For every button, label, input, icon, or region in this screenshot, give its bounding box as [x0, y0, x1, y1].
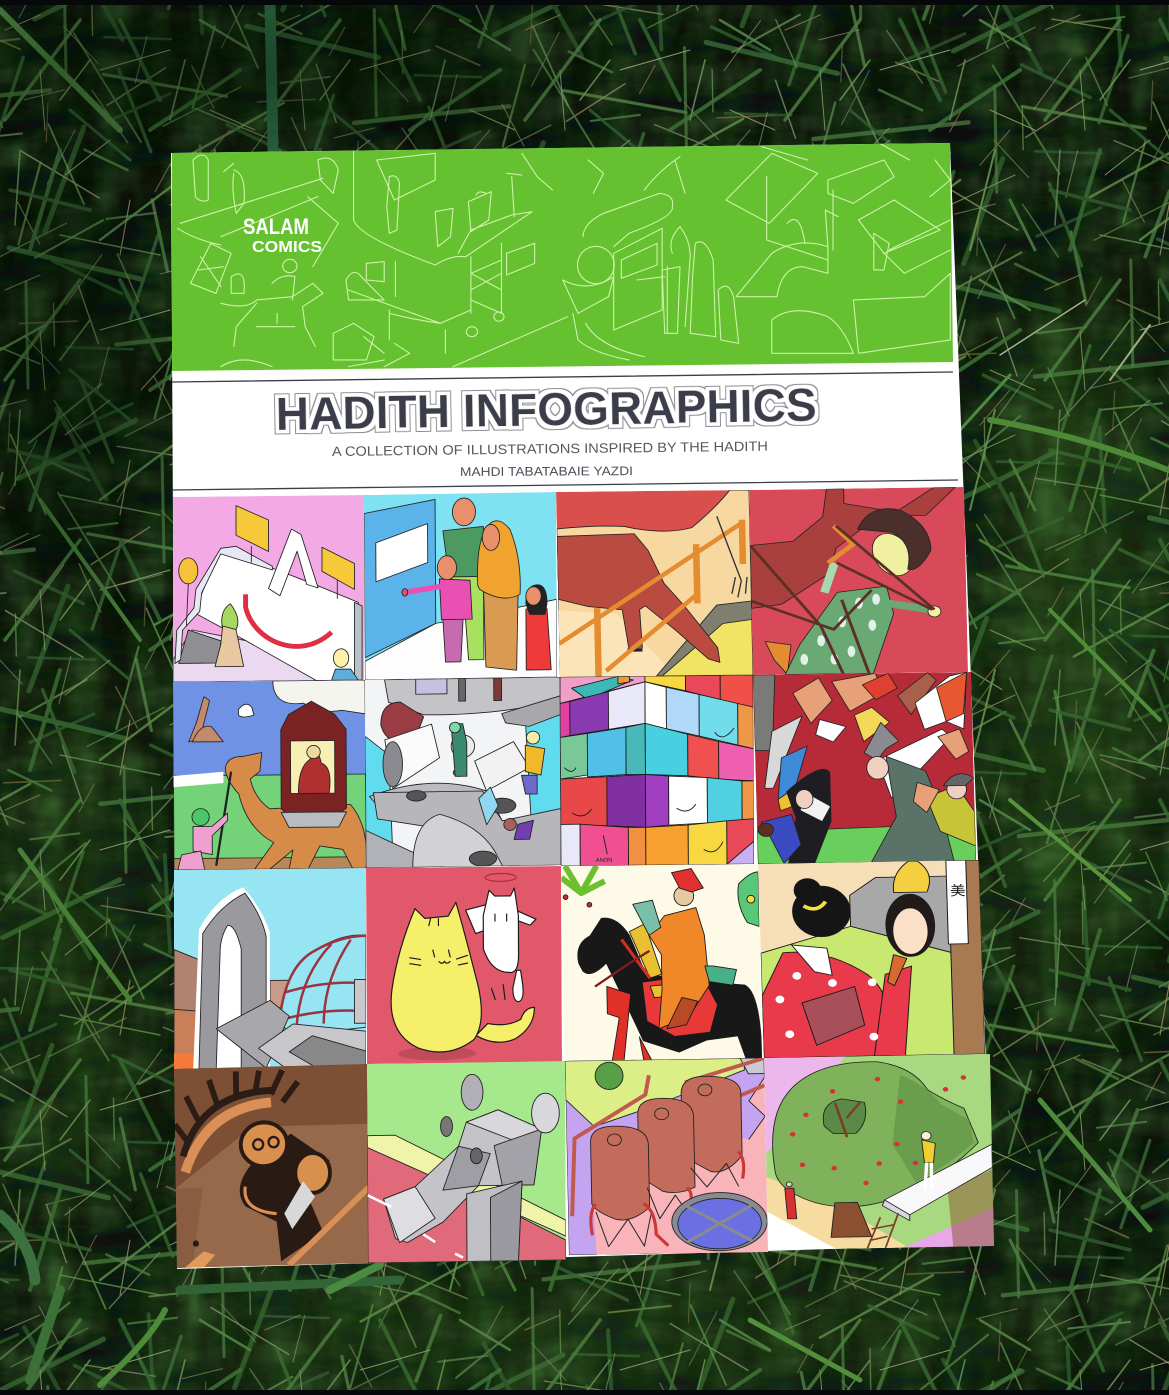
green header panel with line art [165, 140, 960, 375]
book cover [165, 140, 994, 1269]
panel: boy with slingshot [749, 487, 968, 675]
panel: grey robot [367, 1061, 566, 1263]
panel: three tanks [565, 1058, 768, 1255]
panel: arch and dome [174, 868, 366, 1069]
panel: camel and howdah [173, 680, 367, 870]
panel: falling bricks and figures [753, 672, 976, 864]
band rules [172, 372, 958, 490]
title band [172, 372, 958, 490]
panel: machine workshop [365, 677, 561, 868]
panel: coloured smiling bricks [560, 675, 754, 866]
panel: family at door [364, 492, 557, 680]
logo: Salam Comics [244, 218, 322, 252]
line art illustration [178, 140, 950, 367]
panel: horse at fence [556, 490, 753, 677]
panel: gallery sign and rope [173, 495, 364, 682]
author: MAHDI TABATABAIE YAZDI [460, 464, 633, 479]
title: HADITH INFOGRAPHICS [275, 379, 817, 440]
panel: two cats [366, 866, 562, 1064]
subtitle: A COLLECTION OF ILLUSTRATIONS INSPIRED BY THE HADITH [332, 439, 768, 459]
panel: woman in kimono with mirror: 美 [950, 883, 966, 899]
panel: woman in kimono with mirror [758, 860, 985, 1058]
cover base [171, 143, 993, 1269]
panel: tribal mask figure [174, 1064, 370, 1268]
logo: Salam Comics: SALAM [243, 214, 309, 239]
panel: rider on black horse [561, 864, 762, 1061]
logo: Salam Comics: COMICS [252, 239, 322, 256]
panel: coloured smiling bricks: ANON [596, 858, 612, 864]
panel: apple tree [764, 1054, 994, 1250]
